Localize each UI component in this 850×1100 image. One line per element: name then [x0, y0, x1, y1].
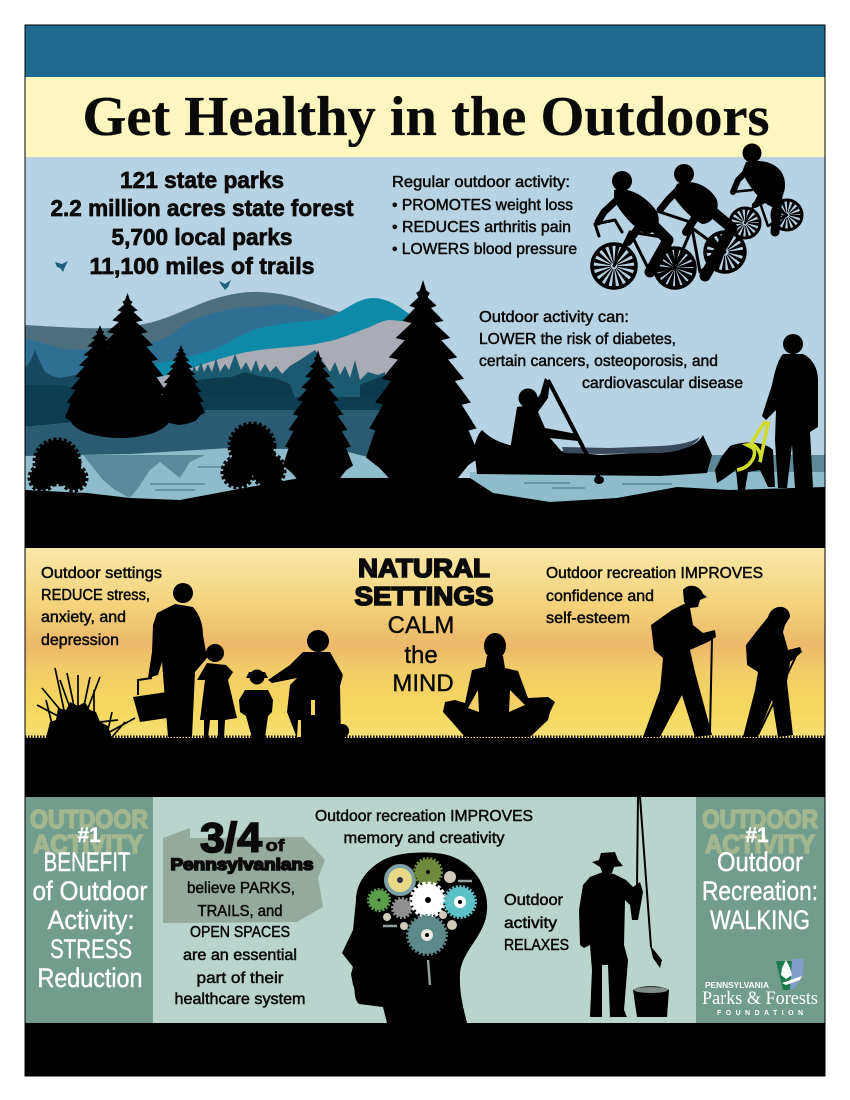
panel: right walking benefit: OUTDOOR — [702, 804, 818, 834]
foreground trees — [65, 280, 480, 490]
text: three quarters of Pennsylvanians: are an essential — [183, 947, 297, 964]
text: outdoor settings reduce stress: REDUCE stress, — [41, 587, 150, 604]
panel: bottom band — [25, 797, 825, 1076]
panel: left stress benefit: OUTDOOR — [30, 804, 148, 834]
text: outdoor settings reduce stress: depression — [41, 632, 119, 649]
text: regular outdoor activity benefits: • REDUCES arthritis pain — [392, 219, 571, 236]
text: outdoor activity lowers disease risk: LOWER the risk of diabetes, — [479, 331, 676, 348]
wheels — [592, 200, 802, 288]
panel: right walking benefit: #1 — [745, 824, 769, 847]
statistics text: 121 state parks — [120, 167, 284, 193]
distant treeline — [25, 350, 400, 400]
panel: left stress benefit: Reduction — [38, 963, 142, 993]
icon: Pennsylvania map — [163, 828, 325, 923]
text: three quarters of Pennsylvanians: 3/4 — [200, 814, 263, 861]
panel: left stress benefit — [25, 797, 153, 1023]
icon: canoe paddler — [474, 378, 712, 484]
text: three quarters of Pennsylvanians: part of their — [196, 970, 284, 987]
text: memory and creativity: Outdoor recreation IMPROVES — [315, 808, 533, 825]
panel: right walking benefit — [696, 797, 825, 1023]
text: outdoor activity lowers disease risk: cardiovascular disease — [582, 375, 743, 392]
logo: Pennsylvania Parks & Forests Foundation: Parks & Forests — [702, 988, 818, 1009]
text: three quarters of Pennsylvanians: of — [266, 836, 285, 855]
birds — [55, 261, 231, 290]
icon: family silhouette — [133, 583, 349, 738]
ground with grass — [25, 737, 825, 798]
icon: head with gears — [342, 853, 487, 1023]
heading: natural settings calm the mind — [354, 553, 494, 697]
ground silhouette — [25, 478, 825, 549]
text: confidence and self-esteem — [546, 565, 763, 627]
text: outdoor activity lowers disease risk: certain cancers, osteoporosis, and — [479, 353, 718, 370]
panel: right walking benefit: ACTIVITY — [705, 829, 815, 859]
text: three quarters of Pennsylvanians: healthcare system — [174, 991, 306, 1008]
text: confidence and self-esteem: Outdoor recreation IMPROVES — [546, 565, 763, 582]
text: confidence and self-esteem: self-esteem — [546, 610, 630, 627]
text: outdoor activity relaxes: RELAXES — [504, 937, 569, 954]
statistics text — [50, 167, 354, 279]
lake water bands — [25, 385, 825, 505]
text: memory and creativity — [315, 808, 533, 847]
icon: two hikers — [643, 586, 802, 737]
top banner — [25, 25, 825, 77]
panel: left stress benefit: BENEFIT — [44, 847, 130, 877]
heading: natural settings calm the mind: the — [404, 642, 438, 669]
icon: person with guide dog — [715, 334, 818, 490]
text: outdoor activity relaxes: Outdoor — [504, 892, 564, 909]
logo: Pennsylvania Parks & Forests Foundation — [702, 959, 818, 1017]
icon: fisherman with bucket — [579, 797, 669, 1017]
icon: grass tuft — [37, 668, 135, 738]
text: outdoor activity relaxes: activity — [504, 915, 557, 932]
text: outdoor settings reduce stress — [41, 565, 162, 649]
text: regular outdoor activity benefits: Regular outdoor activity: — [392, 174, 570, 191]
heading: natural settings calm the mind: NATURAL — [358, 553, 490, 583]
text: memory and creativity: memory and creativity — [344, 830, 504, 847]
panel: right walking benefit: WALKING — [710, 905, 810, 935]
text: three quarters of Pennsylvanians: TRAILS, and — [198, 903, 282, 920]
gears — [369, 859, 475, 985]
text: three quarters of Pennsylvanians: believe PARKS, — [187, 880, 295, 897]
bushes — [30, 424, 284, 490]
panel: left stress benefit: STRESS — [50, 934, 132, 964]
text: three quarters of Pennsylvanians — [170, 814, 314, 1008]
statistics text: 2.2 million acres state forest — [50, 195, 354, 221]
panel: left stress benefit: Activity: — [48, 905, 134, 935]
text: three quarters of Pennsylvanians: Pennsylvanians — [170, 855, 314, 874]
text: confidence and self-esteem: confidence and — [546, 588, 654, 605]
title band: Get Healthy in the Outdoors — [82, 86, 770, 148]
panel: left stress benefit: of Outdoor — [32, 876, 148, 906]
statistics text: 5,700 local parks — [112, 224, 292, 250]
heading: natural settings calm the mind: SETTINGS — [354, 581, 494, 611]
text: outdoor activity relaxes — [504, 892, 569, 954]
text: regular outdoor activity benefits: • PROMOTES weight loss — [392, 197, 573, 214]
riders and frames — [595, 168, 787, 276]
text: outdoor activity lowers disease risk: Outdoor activity can: — [479, 309, 629, 326]
heading: natural settings calm the mind: MIND — [392, 670, 454, 697]
panel: left stress benefit: #1 — [77, 824, 101, 847]
panel: right walking benefit: Outdoor — [717, 847, 803, 877]
text: outdoor activity lowers disease risk — [479, 309, 743, 392]
heading: natural settings calm the mind: CALM — [388, 612, 454, 639]
title band — [25, 77, 825, 158]
logo: Pennsylvania Parks & Forests Foundation: FOUNDATION — [717, 1010, 803, 1017]
panel: sunset scene — [25, 548, 825, 798]
text: outdoor settings reduce stress: anxiety, and — [41, 609, 126, 626]
text: regular outdoor activity benefits — [392, 174, 577, 258]
icon: meditating person — [443, 633, 555, 737]
logo: Pennsylvania Parks & Forests Foundation: PENNSYLVANIA — [705, 981, 769, 990]
statistics text: 11,100 miles of trails — [90, 253, 314, 279]
panel: left stress benefit: ACTIVITY — [33, 829, 143, 859]
text: outdoor settings reduce stress: Outdoor settings — [41, 565, 162, 582]
icon: three cyclists — [592, 144, 802, 288]
text: three quarters of Pennsylvanians: OPEN SPACES — [190, 924, 290, 941]
panel: right walking benefit: Recreation: — [702, 876, 818, 906]
mountain ridges — [25, 292, 412, 400]
text: regular outdoor activity benefits: • LOWERS blood pressure — [392, 241, 577, 258]
panel: lake landscape scene — [25, 157, 825, 549]
